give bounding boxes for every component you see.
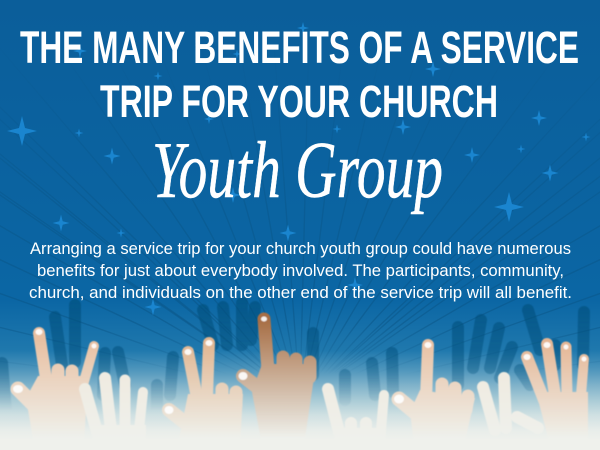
intro paragraph <box>29 239 572 302</box>
script subtitle: Youth Group <box>152 127 443 215</box>
hand: pale rock sign <box>328 389 386 445</box>
intro paragraph: church, and individuals on the other end of the service trip will all benefit. <box>29 283 572 302</box>
title <box>20 22 579 127</box>
hand: pale spread hand <box>483 378 538 430</box>
background silhouette hands <box>2 303 584 410</box>
hand: rock sign <box>13 329 96 445</box>
crowd of raised hands <box>13 316 588 445</box>
hand: pointing <box>394 342 475 445</box>
sparkle stars <box>7 22 590 316</box>
intro paragraph: benefits for just about everybody involved. The participants, community, <box>37 261 564 280</box>
hand: open right hand <box>524 342 588 445</box>
hand: brown pointing <box>238 316 316 445</box>
hand: pale open hand <box>85 378 146 445</box>
intro paragraph: Arranging a service trip for your church youth group could have numerous <box>30 239 571 258</box>
hand: peace sign <box>164 340 243 445</box>
